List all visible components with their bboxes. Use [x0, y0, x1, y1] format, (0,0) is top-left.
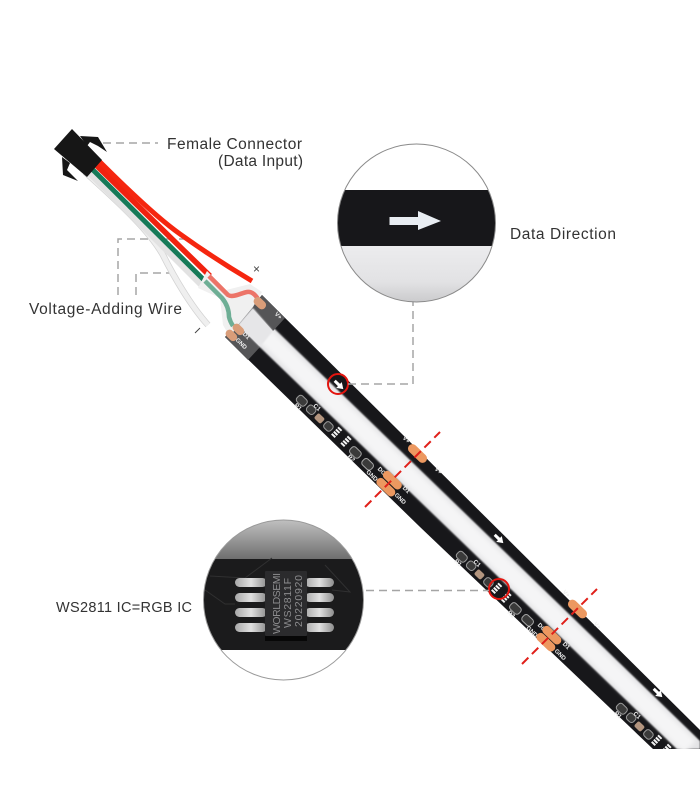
IC pins left	[235, 578, 267, 632]
IC text: WORLDSEMI	[271, 573, 283, 634]
label: female connector: Female Connector	[167, 136, 302, 153]
solder pad lower 1	[541, 624, 563, 646]
component group 3: C1	[632, 711, 642, 721]
dashed cut line	[522, 589, 597, 664]
cut mark 1	[365, 432, 443, 507]
solder pad upper	[406, 442, 429, 465]
IC body	[265, 571, 307, 636]
strip start pads: V+	[273, 312, 283, 321]
cut mark 1: GND	[393, 492, 407, 507]
component group 2: C1	[472, 559, 482, 569]
magnifier: IC	[200, 518, 370, 680]
IC text: 20220920	[293, 575, 305, 627]
component group 2: R1	[452, 559, 463, 569]
component group 1	[290, 391, 387, 486]
wire: red main	[93, 162, 210, 276]
component group 1: DO	[376, 467, 387, 477]
solder pad lower 2	[535, 631, 557, 653]
strip start pads: GND	[234, 337, 248, 352]
strip start pads	[224, 295, 283, 352]
end cap lower	[225, 325, 260, 360]
strip arrow 1	[332, 378, 346, 392]
mark: not connected: ×	[253, 262, 260, 276]
label line: voltage-adding wire inner	[136, 273, 175, 295]
solder pad lower 2	[375, 476, 397, 498]
component group 2: GND	[524, 625, 539, 640]
component group 1: R2	[346, 454, 356, 464]
cut mark 1: V+	[401, 436, 411, 445]
trace lines	[210, 558, 272, 578]
component group 3	[610, 699, 672, 760]
component group 1: C1	[312, 403, 322, 413]
label: IC: WS2811 IC=RGB IC	[56, 600, 192, 616]
solder pad upper	[566, 598, 589, 620]
arrow glyph	[390, 211, 441, 230]
LED strip body	[225, 295, 700, 749]
strip arrow 3	[651, 686, 665, 700]
label line: data direction	[348, 302, 413, 384]
wire: white voltage-adding	[85, 172, 208, 325]
diffuser start	[238, 308, 273, 347]
cut mark 2	[522, 589, 602, 664]
wire: white main	[85, 168, 202, 285]
dashed cut line	[365, 432, 440, 507]
cut mark 2: GND	[553, 648, 567, 663]
end cap upper	[252, 295, 285, 331]
label: female connector	[167, 136, 303, 170]
component group 1: R1	[292, 403, 303, 413]
label: data direction: Data Direction	[510, 226, 616, 243]
label line: female connector	[103, 142, 158, 144]
IC text: WS2811F	[282, 578, 294, 628]
mark: minus	[195, 328, 200, 333]
magnifier: data direction	[337, 144, 496, 302]
strip start pads: D1	[241, 331, 251, 342]
wire: red loose	[97, 159, 252, 281]
diffuser highlight	[248, 319, 690, 747]
wires and connector	[54, 129, 262, 337]
component group 2	[450, 547, 547, 642]
IC pins right	[305, 578, 334, 632]
solder pad lower 1	[381, 469, 404, 491]
cut mark 1: V+	[433, 467, 443, 476]
highlight ring: arrow	[328, 374, 348, 394]
heat shrink	[198, 271, 262, 337]
shrink-covered green wire	[205, 281, 233, 326]
cut mark 2: V+	[561, 590, 571, 599]
IC shadow	[265, 636, 307, 641]
shrink-covered red wire	[209, 276, 260, 302]
label: voltage-adding wire: Voltage-Adding Wire	[29, 301, 182, 318]
cut mark 1: D1	[401, 485, 411, 496]
bottom cut of strip	[0, 749, 700, 800]
component group 1: GND	[364, 469, 379, 484]
component group 3: R1	[612, 711, 623, 721]
strip diffuser band	[238, 308, 700, 749]
cut mark 2: V+	[592, 622, 602, 631]
label line: voltage-adding wire outer	[118, 239, 190, 295]
wire: green	[88, 165, 206, 282]
highlight ring: IC	[489, 579, 509, 599]
label: female connector: (Data Input)	[218, 153, 303, 170]
strip arrow 2	[492, 532, 506, 546]
IC text	[273, 574, 302, 634]
component group 2: R2	[506, 610, 516, 620]
connector housing	[54, 129, 107, 181]
component group 2: DO	[536, 623, 547, 633]
label line: IC	[366, 590, 489, 592]
cut mark 2: D1	[561, 641, 571, 652]
